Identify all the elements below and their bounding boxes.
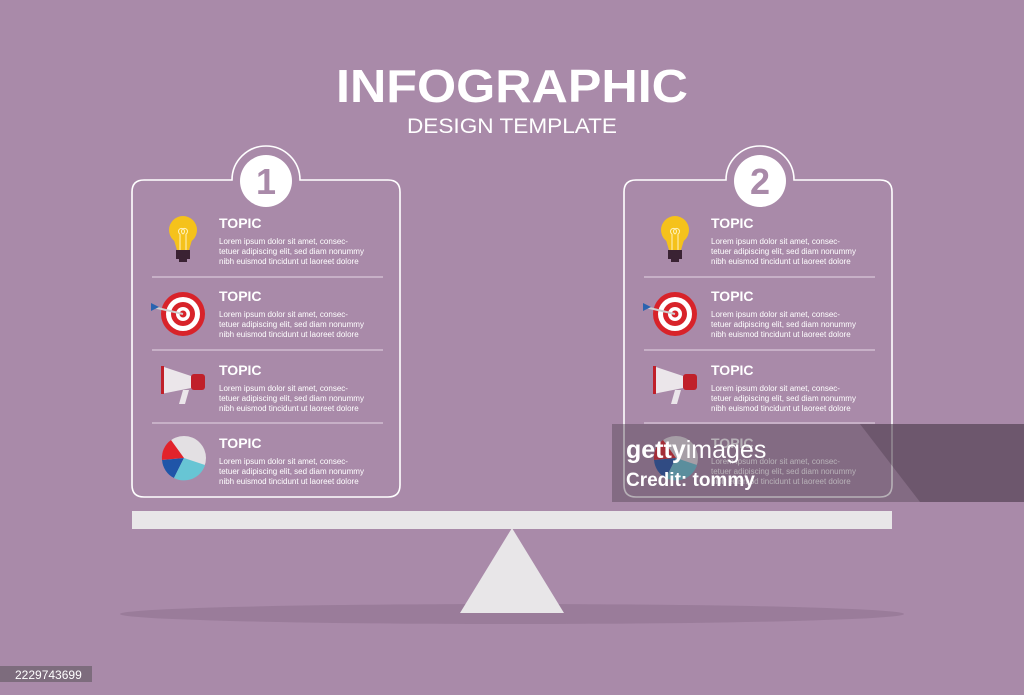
watermark overlay: gettyimages bbox=[626, 436, 766, 464]
row 3 text bbox=[219, 362, 364, 413]
image id label bbox=[0, 666, 92, 682]
icon: bulb bbox=[169, 216, 197, 262]
panel: 1 bbox=[132, 146, 400, 497]
row 1 text: tetuer adipiscing elit, sed diam nonummy bbox=[219, 247, 364, 256]
icon: pie chart bbox=[654, 436, 698, 480]
number badge 2 bbox=[734, 155, 786, 207]
row 2 text: nibh euismod tincidunt ut laoreet dolore bbox=[711, 330, 851, 339]
number badge 1 bbox=[240, 155, 292, 207]
panel: 2 bbox=[624, 146, 892, 497]
shadow bbox=[120, 604, 904, 624]
row 3 text: tetuer adipiscing elit, sed diam nonummy bbox=[711, 394, 856, 403]
watermark overlay bbox=[612, 424, 1024, 502]
row 1 text: Lorem ipsum dolor sit amet, consec- bbox=[219, 237, 348, 246]
row 4 text: Lorem ipsum dolor sit amet, consec- bbox=[711, 457, 840, 466]
row 2 text bbox=[219, 288, 364, 339]
row 3 text: TOPIC bbox=[711, 362, 754, 378]
row 3 text: Lorem ipsum dolor sit amet, consec- bbox=[711, 384, 840, 393]
row 4 text: tetuer adipiscing elit, sed diam nonummy bbox=[711, 467, 856, 476]
row 4 text: Lorem ipsum dolor sit amet, consec- bbox=[219, 457, 348, 466]
row 4 text: TOPIC bbox=[711, 435, 754, 451]
image id label: 2229743699 bbox=[15, 668, 82, 682]
row 4 text: nibh euismod tincidunt ut laoreet dolore bbox=[711, 477, 851, 486]
row 1 text: nibh euismod tincidunt ut laoreet dolore bbox=[219, 257, 359, 266]
row 1 text: Lorem ipsum dolor sit amet, consec- bbox=[711, 237, 840, 246]
row 1 text: nibh euismod tincidunt ut laoreet dolore bbox=[711, 257, 851, 266]
seesaw fulcrum bbox=[460, 528, 564, 613]
row 3 text: nibh euismod tincidunt ut laoreet dolore bbox=[711, 404, 851, 413]
row 1 text bbox=[711, 215, 856, 266]
seesaw beam bbox=[132, 511, 892, 529]
row 3 text: tetuer adipiscing elit, sed diam nonummy bbox=[219, 394, 364, 403]
icon: pie chart bbox=[162, 436, 206, 480]
row 1 text bbox=[219, 215, 364, 266]
row 3 text: Lorem ipsum dolor sit amet, consec- bbox=[219, 384, 348, 393]
icon: megaphone bbox=[653, 366, 697, 404]
row 4 text: tetuer adipiscing elit, sed diam nonummy bbox=[219, 467, 364, 476]
row 4 text bbox=[219, 435, 364, 486]
row 2 text: TOPIC bbox=[711, 288, 754, 304]
row 2 text: nibh euismod tincidunt ut laoreet dolore bbox=[219, 330, 359, 339]
title: INFOGRAPHIC bbox=[336, 60, 688, 112]
number badge 2: 2 bbox=[750, 161, 770, 202]
row 2 text: Lorem ipsum dolor sit amet, consec- bbox=[219, 310, 348, 319]
row 2 text: Lorem ipsum dolor sit amet, consec- bbox=[711, 310, 840, 319]
row 2 text: tetuer adipiscing elit, sed diam nonummy bbox=[219, 320, 364, 329]
row 3 text: TOPIC bbox=[219, 362, 262, 378]
row 1 text: TOPIC bbox=[219, 215, 262, 231]
row 3 text bbox=[711, 362, 856, 413]
row 2 text bbox=[711, 288, 856, 339]
watermark overlay: Credit: tommy bbox=[626, 470, 755, 491]
row 1 text: tetuer adipiscing elit, sed diam nonummy bbox=[711, 247, 856, 256]
row 2 text: TOPIC bbox=[219, 288, 262, 304]
row 4 text: nibh euismod tincidunt ut laoreet dolore bbox=[219, 477, 359, 486]
icon: bulb bbox=[661, 216, 689, 262]
subtitle: DESIGN TEMPLATE bbox=[407, 115, 617, 138]
row 2 text: tetuer adipiscing elit, sed diam nonummy bbox=[711, 320, 856, 329]
icon: megaphone bbox=[161, 366, 205, 404]
row 3 text: nibh euismod tincidunt ut laoreet dolore bbox=[219, 404, 359, 413]
icon: target bbox=[643, 292, 697, 336]
row 4 text: TOPIC bbox=[219, 435, 262, 451]
row 4 text bbox=[711, 435, 856, 486]
icon: target bbox=[151, 292, 205, 336]
row 1 text: TOPIC bbox=[711, 215, 754, 231]
number badge 1: 1 bbox=[256, 161, 276, 202]
